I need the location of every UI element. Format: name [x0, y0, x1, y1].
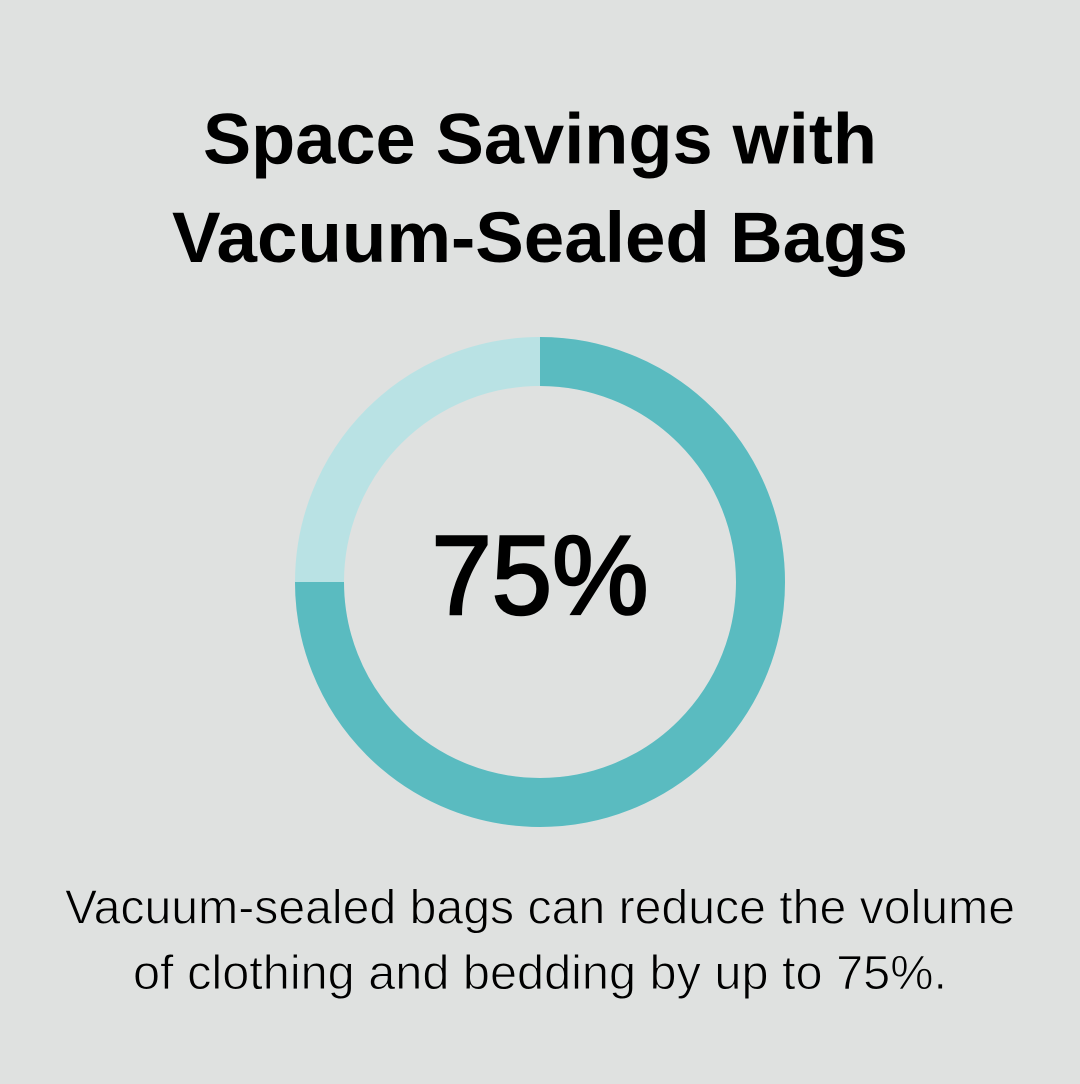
title: Space Savings with	[203, 100, 877, 180]
title	[172, 100, 908, 278]
title: Vacuum-Sealed Bags	[172, 199, 908, 278]
description: Vacuum-sealed bags can reduce the volume	[65, 882, 1015, 934]
description	[65, 882, 1015, 1000]
description: of clothing and bedding by up to 75%.	[133, 947, 947, 1000]
center value: 75%	[432, 513, 648, 638]
donut chart: 75%	[320, 362, 760, 802]
